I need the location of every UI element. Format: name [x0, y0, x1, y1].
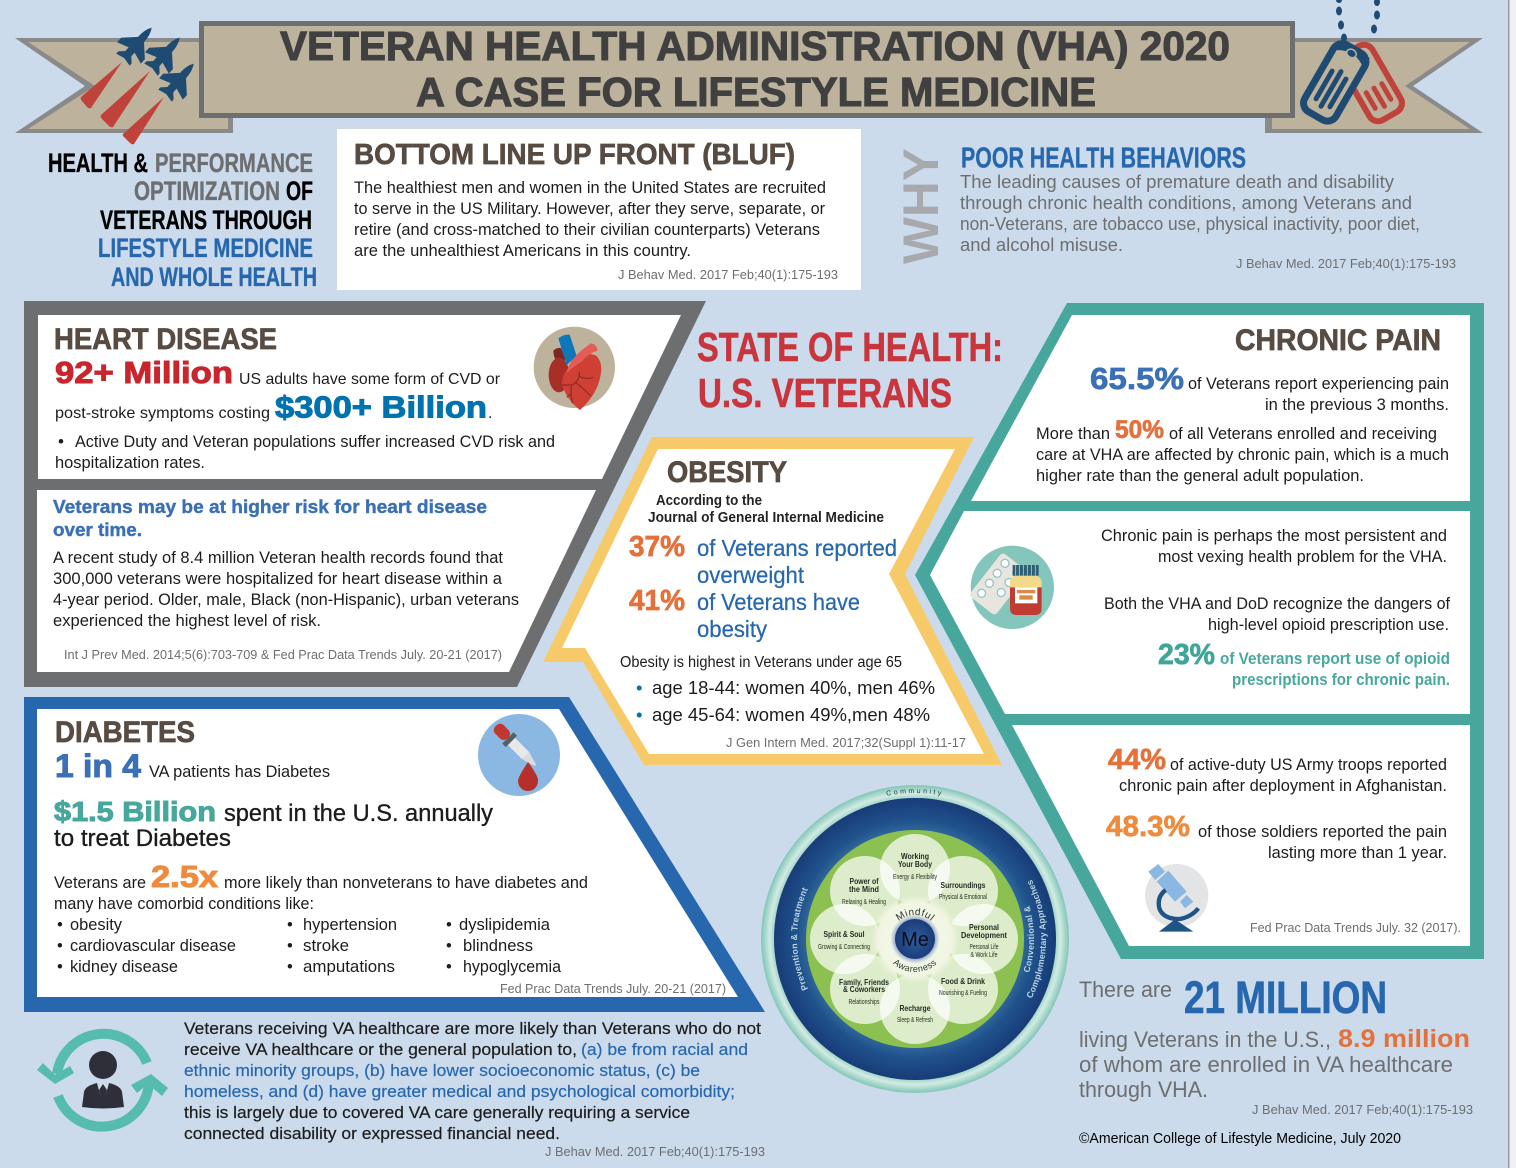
list: comorbid conditions: blindness [463, 937, 533, 955]
stat: 1 in 4 [55, 748, 330, 784]
stat: 44 percent [1108, 744, 1447, 795]
text: source [648, 493, 884, 526]
right ribbon [1265, 38, 1483, 133]
chart: whole health circle [761, 785, 1069, 1093]
panel: bottom line up front [337, 129, 861, 290]
heading: WHY vertical: WHY [893, 148, 949, 264]
panel: heart disease [24, 301, 706, 687]
chart: whole health circle: Physical & Emotional [939, 894, 987, 901]
heading: health and performance optimization: HEALTH & [48, 148, 148, 178]
chart: whole health circle: Complementary Approaches [1027, 880, 1048, 998]
chart: whole health circle: Nourishing & Fueling [939, 990, 987, 997]
stat: 50 percent: higher rate than the general adult population. [1036, 467, 1364, 485]
text: veterans at higher risk: over time. [53, 519, 142, 540]
list: comorbid conditions: amputations [303, 958, 395, 976]
title banner: A CASE FOR LIFESTYLE MEDICINE [416, 69, 1096, 115]
list: comorbid conditions: stroke [303, 937, 349, 955]
icon: heart [534, 327, 615, 410]
text: BLUF body: to serve in the US Military. However, after they serve, separate, or [354, 199, 825, 218]
chart: whole health circle: Energy & Flexibility [893, 874, 937, 881]
chart: whole health circle: & Coworkers [843, 985, 885, 994]
stat: 1 in 4: 1 in 4 [55, 748, 141, 784]
text: BLUF body: retire (and cross-matched to their civilian counterparts) Veterans [354, 220, 820, 239]
list: comorbid conditions: • [287, 937, 293, 955]
stat: 23 percent opioid: prescriptions for chronic pain. [1232, 671, 1450, 689]
chart: whole health circle: Relaxing & Healing [842, 899, 886, 906]
stat: 2.5x: Veterans are [54, 874, 146, 892]
chart: whole health circle: Spirit & Soul [824, 930, 864, 939]
stat: 65.5 percent: 65.5% [1090, 361, 1184, 396]
list: comorbid conditions: obesity [70, 916, 123, 934]
list: comorbid conditions: dyslipidemia [459, 916, 551, 934]
heading: heart disease: HEART DISEASE [54, 323, 277, 356]
stat block: 21 million living veterans: 21 MILLION [1184, 972, 1387, 1023]
list: comorbid conditions: hypoglycemia [463, 958, 562, 976]
stat: 41 percent obesity: of Veterans have [697, 589, 860, 615]
icon: pills and bottle [969, 546, 1054, 629]
chart: whole health circle: the Mind [849, 885, 879, 894]
list: comorbid conditions: • [57, 916, 63, 934]
text block: VA healthcare comparison: receive VA healthcare or the general population to, [184, 1040, 577, 1059]
stat: 44 percent: chronic pain after deployment in Afghanistan. [1119, 777, 1447, 795]
text block: poor health behaviors: J Behav Med. 2017 Feb;40(1):175-193 [1236, 256, 1456, 271]
stat: 92+ million: 92+ Million [55, 355, 233, 390]
list: comorbid conditions: • [446, 937, 452, 955]
chart: whole health circle: Development [961, 931, 1007, 940]
text: source: According to the [656, 493, 762, 509]
icon: microscope [1145, 864, 1208, 932]
title banner [202, 23, 1292, 116]
stat: 300+ billion: post-stroke symptoms costing [55, 405, 270, 422]
list: comorbid conditions: • [57, 958, 63, 976]
text: veterans at higher risk: 4-year period. Older, male, Black (non-Hispanic), urban veterans [53, 590, 519, 609]
stat: 92+ million [55, 355, 501, 390]
heading: health and performance optimization: PERFORMANCE [155, 148, 313, 178]
citation: Fed Prac Data Trends July. 20-21 (2017) [500, 981, 726, 996]
title banner: VETERAN HEALTH ADMINISTRATION (VHA) 2020 [280, 23, 1230, 69]
list: comorbid conditions: • [287, 916, 293, 934]
stat: 2.5x: 2.5x [151, 859, 219, 894]
chart: whole health circle: Relationships [848, 999, 880, 1006]
chart: whole health circle: Food & Drink [941, 977, 985, 986]
text block: poor health behaviors: The leading causes of premature death and disability [960, 172, 1394, 192]
list: comorbid conditions: • [446, 916, 452, 934]
text block: poor health behaviors [960, 142, 1456, 271]
text: chronic pain persistent: Chronic pain is perhaps the most persistent and [1101, 527, 1447, 545]
text: age breakdown: age 45-64: women 49%,men 48% [652, 704, 930, 725]
left ribbon [15, 38, 233, 133]
stat: 1.5 billion [54, 796, 493, 852]
stat: 37 percent overweight [629, 531, 897, 588]
citation: Fed Prac Data Trends July. 32 (2017). [1250, 920, 1461, 935]
text block: poor health behaviors: through chronic health conditions, among Veterans and [960, 193, 1412, 213]
text block: VA healthcare comparison: homeless, and (d) have greater medical and psychological comorbidity; [184, 1082, 735, 1101]
citation: J Behav Med. 2017 Feb;40(1):175-193 [545, 1144, 765, 1159]
text block: VA healthcare comparison: Veterans receiving VA healthcare are more likely than Veterans who do not [184, 1019, 761, 1038]
list: comorbid conditions: • [446, 958, 452, 976]
stat: 50 percent: 50% [1115, 416, 1164, 444]
stat: 50 percent: of all Veterans enrolled and receiving [1169, 425, 1437, 443]
stat: 65.5 percent: in the previous 3 months. [1265, 396, 1449, 414]
stat: 50 percent: care at VHA are affected by chronic pain, which is a much [1036, 446, 1449, 464]
panel: diabetes [24, 697, 765, 1012]
citation: Int J Prev Med. 2014;5(6):703-709 & Fed Prac Data Trends July. 20-21 (2017) [64, 647, 502, 662]
stat: 1 in 4: VA patients has Diabetes [149, 763, 330, 781]
stat: 37 percent overweight: 37% [629, 531, 685, 563]
chart: whole health circle: Personal [969, 923, 999, 932]
icon: blood dropper [478, 714, 560, 796]
stat: 65.5 percent [1090, 361, 1449, 414]
icon: person with circular arrows [37, 1034, 168, 1127]
copyright: ©American College of Lifestyle Medicine, July 2020 [1079, 1131, 1401, 1147]
stat: 65.5 percent: of Veterans report experiencing pain [1188, 375, 1449, 393]
stat: 2.5x [54, 859, 588, 913]
right page edge [1508, 0, 1516, 1168]
text block: poor health behaviors: POOR HEALTH BEHAVIORS [961, 142, 1246, 174]
stat: 300+ billion [55, 390, 492, 424]
text: chronic pain persistent [1101, 527, 1450, 634]
text block: VA healthcare comparison: this is largely due to covered VA care generally requiring a service [184, 1103, 690, 1122]
text block: poor health behaviors: non-Veterans, are tobacco use, physical inactivity, poor diet, [960, 214, 1420, 234]
chart: whole health circle: Working [901, 852, 929, 861]
stat: 44 percent: of active-duty US Army troops reported [1170, 756, 1447, 774]
stat: 300+ billion: . [488, 405, 492, 422]
stat: 1.5 billion: to treat Diabetes [54, 825, 231, 852]
text block: VA healthcare comparison [184, 1019, 761, 1143]
list: comorbid conditions: kidney disease [70, 958, 178, 976]
chart: whole health circle: & Work Life [970, 952, 998, 959]
chart: whole health circle: Power of [850, 877, 879, 886]
heading: health and performance optimization: LIFESTYLE MEDICINE [98, 233, 313, 263]
text: veterans at higher risk: 300,000 veterans were hospitalized for heart disease within a [53, 569, 503, 588]
stat: 37 percent overweight: of Veterans reported [697, 535, 897, 561]
text block: VA healthcare comparison: (a) be from racial and [581, 1040, 748, 1059]
heading: health and performance optimization: OF [286, 176, 313, 206]
text: BLUF body: are the unhealthiest Americans in this country. [354, 241, 691, 260]
panel: chronic pain [915, 303, 1484, 959]
text: veterans at higher risk: experienced the highest level of risk. [53, 611, 321, 630]
text: age breakdown: • [636, 704, 642, 725]
text: chronic pain persistent: high-level opioid prescription use. [1208, 616, 1449, 634]
heading: diabetes: DIABETES [55, 716, 195, 749]
stat: 50 percent [1036, 416, 1449, 485]
text: active duty bullet [55, 432, 555, 472]
heading: health and performance optimization: AND WHOLE HEALTH [111, 262, 317, 292]
text block: VA healthcare comparison: ethnic minority groups, (b) have lower socioeconomic status, (c) be [184, 1061, 700, 1080]
stat block: 21 million living veterans: There are [1079, 977, 1172, 1002]
heading: state of health [697, 324, 1003, 416]
stat: 50 percent: More than [1036, 425, 1110, 443]
text: age breakdown: • [636, 677, 642, 698]
stat block: 21 million living veterans: J Behav Med. 2017 Feb;40(1):175-193 [1252, 1102, 1473, 1117]
chart: whole health circle: Family, Friends [839, 978, 889, 987]
list: comorbid conditions: • [287, 958, 293, 976]
stat: 2.5x: many have comorbid conditions like: [54, 895, 314, 913]
stat: 2.5x: more likely than nonveterans to have diabetes and [224, 874, 588, 892]
stat block: 21 million living veterans: of whom are enrolled in VA healthcare [1079, 1052, 1453, 1077]
text: age breakdown: age 18-44: women 40%, men 46% [652, 677, 935, 698]
stat: 48.3 percent: lasting more than 1 year. [1268, 844, 1447, 862]
icon: jets with red trails [81, 17, 206, 144]
text: active duty bullet: hospitalization rates. [55, 453, 205, 472]
heading: health and performance optimization: OPTIMIZATION [134, 176, 280, 206]
heading: state of health: STATE OF HEALTH: [697, 324, 1003, 370]
chart: whole health circle: Prevention & Treatment [791, 887, 808, 991]
heading: health and performance optimization: VETERANS THROUGH [100, 205, 312, 235]
text: BLUF body: The healthiest men and women in the United States are recruited [354, 178, 826, 197]
stat: 300+ billion: $300+ Billion [275, 390, 487, 424]
heading: obesity: OBESITY [667, 456, 787, 489]
chart: whole health circle: Awareness [892, 960, 936, 972]
text block: poor health behaviors: and alcohol misuse. [960, 235, 1123, 255]
stat: 1.5 billion: $1.5 Billion [54, 796, 216, 827]
chart: whole health circle: Your Body [898, 860, 932, 869]
heading: health and performance optimization [48, 148, 317, 292]
text: veterans at higher risk: A recent study of 8.4 million Veteran health records found that [53, 548, 503, 567]
icon: dog tags [1300, 0, 1406, 125]
stat: 41 percent obesity: 41% [629, 585, 685, 617]
stat: 23 percent opioid: of Veterans report use of opioid [1220, 650, 1450, 668]
list: comorbid conditions: hypertension [303, 916, 397, 934]
chart: whole health circle: Recharge [900, 1004, 931, 1013]
text: age breakdown: Obesity is highest in Veterans under age 65 [620, 654, 902, 671]
chart: whole health circle: Sleep & Refresh [897, 1017, 933, 1024]
stat: 23 percent opioid [1158, 639, 1450, 689]
chart: whole health circle: Growing & Connecting [818, 944, 870, 951]
stat: 41 percent obesity [629, 585, 860, 642]
list: comorbid conditions: • [57, 937, 63, 955]
stat: 37 percent overweight: overweight [697, 562, 805, 588]
stat block: 21 million living veterans: through VHA. [1079, 1077, 1208, 1102]
text: chronic pain persistent: most vexing health problem for the VHA. [1158, 548, 1447, 566]
panel: obesity [543, 437, 1002, 765]
stat block: 21 million living veterans [1079, 972, 1473, 1117]
text: veterans at higher risk: Veterans may be at higher risk for heart disease [53, 496, 487, 517]
stat block: 21 million living veterans: living Veterans in the U.S., [1079, 1027, 1331, 1052]
text: active duty bullet: Active Duty and Veteran populations suffer increased CVD risk and [75, 432, 555, 451]
chart: whole health circle: Personal Life [970, 944, 999, 951]
text: chronic pain persistent: Both the VHA and DoD recognize the dangers of [1104, 595, 1450, 613]
stat block: 21 million living veterans: 8.9 million [1338, 1025, 1470, 1053]
chart: whole health circle: Conventional & [1024, 906, 1034, 972]
text: active duty bullet: • [58, 432, 64, 451]
stat: 92+ million: US adults have some form of CVD or [239, 371, 501, 388]
stat: 48.3 percent: 48.3% [1106, 811, 1190, 843]
heading: BLUF: BOTTOM LINE UP FRONT (BLUF) [354, 139, 795, 171]
text: BLUF body [354, 178, 826, 260]
chart: whole health circle: Me [901, 929, 929, 951]
text: source: Journal of General Internal Medicine [648, 510, 884, 526]
chart: whole health circle: Community [886, 788, 942, 796]
text: age breakdown [620, 654, 935, 725]
chart: whole health circle: Mindful [896, 908, 935, 921]
stat: 41 percent obesity: obesity [697, 616, 767, 642]
stat: 48.3 percent [1106, 811, 1447, 862]
citation: J Gen Intern Med. 2017;32(Suppl 1):11-17 [726, 735, 966, 750]
stat: 48.3 percent: of those soldiers reported the pain [1198, 823, 1447, 841]
list: comorbid conditions [57, 916, 562, 976]
text: veterans at higher risk [53, 496, 519, 630]
citation: J Behav Med. 2017 Feb;40(1):175-193 [618, 267, 838, 282]
stat: 44 percent: 44% [1108, 744, 1166, 776]
text block: VA healthcare comparison: connected disability or expressed financial need. [184, 1124, 560, 1143]
heading: state of health: U.S. VETERANS [698, 370, 952, 416]
heading: chronic pain: CHRONIC PAIN [1235, 324, 1441, 357]
chart: whole health circle: Surroundings [940, 881, 986, 890]
list: comorbid conditions: cardiovascular disease [70, 937, 236, 955]
stat: 23 percent opioid: 23% [1158, 639, 1215, 671]
stat: 1.5 billion: spent in the U.S. annually [224, 800, 493, 827]
